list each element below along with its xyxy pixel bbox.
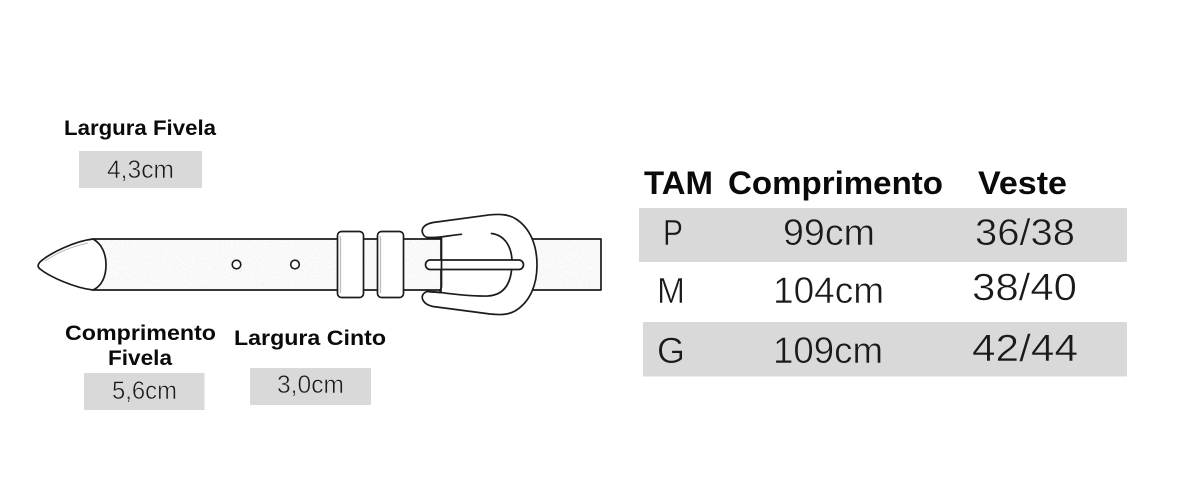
- row G: [643, 322, 1127, 376]
- table header: Veste: [978, 165, 1067, 201]
- row M: [657, 267, 1077, 311]
- label: comprimento fivela: 5,6cm: [112, 377, 177, 405]
- size table: [639, 165, 1127, 376]
- label: largura cinto: Largura Cinto: [234, 326, 386, 350]
- row P: [639, 208, 1127, 262]
- belt strap texture: [95, 240, 600, 289]
- row G: G: [657, 330, 685, 371]
- row M: 104cm: [773, 270, 884, 311]
- belt loops: [338, 232, 404, 298]
- table header: Comprimento: [728, 165, 943, 201]
- label: comprimento fivela: Fivela: [108, 346, 173, 370]
- belt tip: [38, 239, 106, 290]
- row M: M: [657, 270, 685, 311]
- table header: TAM: [644, 165, 713, 201]
- row P: 36/38: [975, 212, 1075, 253]
- label: comprimento fivela: Comprimento: [65, 321, 216, 345]
- label: comprimento fivela: [65, 321, 216, 410]
- row G: 42/44: [972, 328, 1078, 370]
- illustration: belt: [38, 214, 601, 315]
- label: largura fivela: 4,3cm: [107, 156, 174, 184]
- belt strap outline: [93, 239, 601, 290]
- table header: [644, 165, 1067, 201]
- row P: 99cm: [783, 212, 875, 253]
- buckle: [422, 214, 537, 315]
- label: largura cinto: 3,0cm: [277, 371, 344, 399]
- label: largura cinto: [234, 326, 386, 405]
- row P: P: [663, 212, 683, 253]
- belt holes: [232, 260, 299, 269]
- label: largura fivela: [64, 116, 217, 188]
- label: largura fivela: Largura Fivela: [64, 116, 217, 140]
- row G: 109cm: [773, 330, 883, 371]
- row M: 38/40: [972, 267, 1077, 309]
